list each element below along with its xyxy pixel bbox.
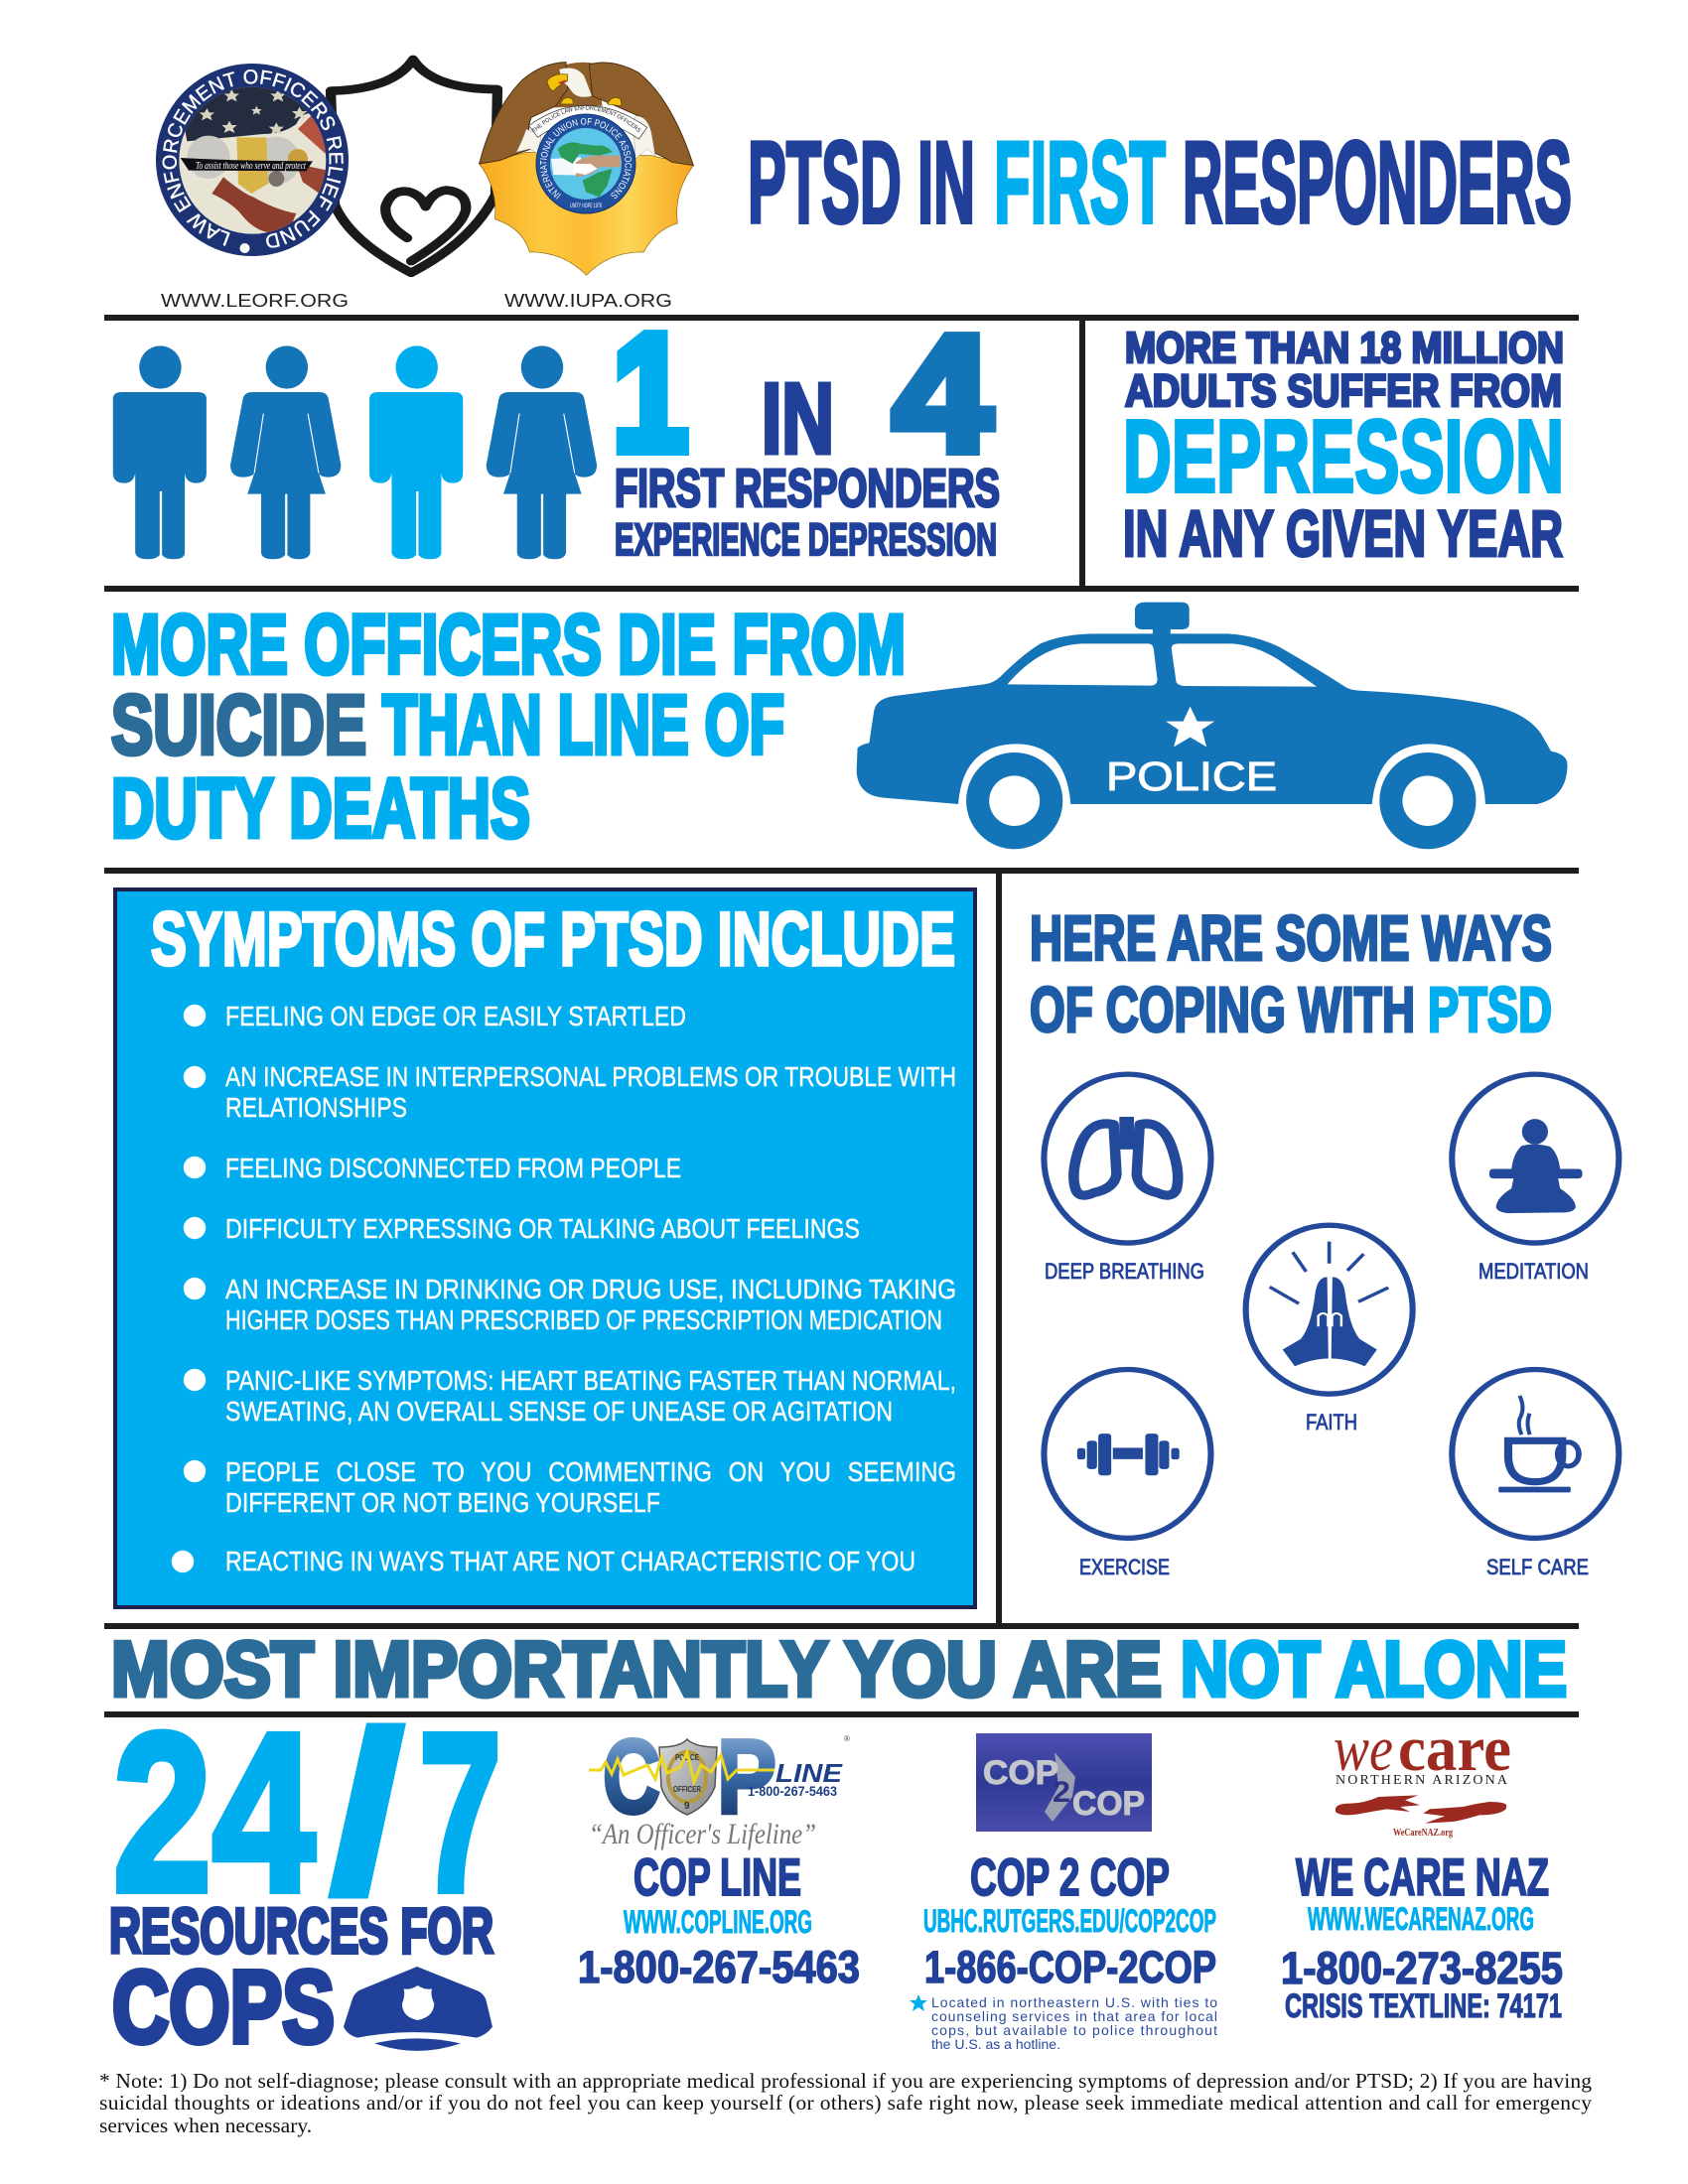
label: experience depression: EXPERIENCE DEPRESSION bbox=[615, 514, 997, 565]
icon: exercise dumbbell bbox=[1044, 1370, 1211, 1538]
icon: faith praying hands bbox=[1246, 1225, 1413, 1394]
phone: cop 2 cop: 1-866-COP-2COP bbox=[924, 1942, 1216, 1992]
logo: cop line: 1-800-267-5463 bbox=[748, 1783, 837, 1799]
icon: police car bbox=[857, 603, 1568, 849]
phone: cop line: 1-800-267-5463 bbox=[578, 1942, 860, 1992]
icon: police hat bbox=[344, 1967, 492, 2051]
logo: law enforcement officers relief fund: LAW ENFORCEMENT OFFICERS RELIEF FUND bbox=[163, 69, 344, 248]
logo: international union of police associations bbox=[479, 62, 694, 276]
name: we care naz: WE CARE NAZ bbox=[1296, 1848, 1549, 1907]
url: iupa: WWW.IUPA.ORG bbox=[504, 291, 672, 311]
logo: we care: we bbox=[1334, 1713, 1393, 1785]
resource: we care naz bbox=[1281, 1713, 1563, 2025]
heading: coping: OF COPING WITH bbox=[1030, 974, 1415, 1045]
logo: cop 2 cop: COP bbox=[1072, 1785, 1145, 1823]
symptom list: AN INCREASE IN INTERPERSONAL PROBLEMS OR TROUBLE WITH bbox=[225, 1061, 956, 1092]
logo: cop line: P bbox=[717, 1718, 776, 1836]
logo: we care: WeCareNAZ.org bbox=[1393, 1828, 1453, 1839]
note: cop 2 cop coverage: cops, but available to police throughout bbox=[931, 2022, 1217, 2038]
panel: 18 million adults: MORE THAN 18 MILLION bbox=[1125, 324, 1564, 372]
banner: flag motto: To assist those who serve and protect bbox=[196, 161, 306, 172]
url: copline: WWW.COPLINE.ORG bbox=[624, 1904, 812, 1940]
stat: 1 in 4: IN bbox=[762, 363, 834, 475]
label: meditation: MEDITATION bbox=[1478, 1259, 1589, 1284]
heading: coping bbox=[1030, 902, 1552, 1045]
logo: we care bbox=[1334, 1713, 1511, 1839]
symptom list: REACTING IN WAYS THAT ARE NOT CHARACTERISTIC OF YOU bbox=[225, 1546, 915, 1576]
title bbox=[748, 117, 1572, 247]
logo: heart shield bbox=[331, 60, 497, 273]
footnote: services when necessary. bbox=[99, 2114, 312, 2137]
panel: 18 million adults: ADULTS SUFFER FROM bbox=[1125, 365, 1562, 416]
stat: 24/7: 4 bbox=[212, 1688, 315, 1939]
symptom list bbox=[172, 1001, 956, 1576]
symptom list: PANIC-LIKE SYMPTOMS: HEART BEATING FASTER THAN NORMAL, bbox=[225, 1365, 956, 1396]
note: cop 2 cop coverage: counseling services in that area for local bbox=[931, 2008, 1217, 2024]
panel: officer suicide headline: THAN LINE OF bbox=[382, 678, 784, 771]
banner: not alone: NOT ALONE bbox=[1181, 1625, 1567, 1712]
crisis textline: CRISIS TEXTLINE: 74171 bbox=[1285, 1987, 1562, 2025]
label: first responders: FIRST RESPONDERS bbox=[615, 459, 1000, 518]
logo: cop line: POLICE bbox=[675, 1753, 700, 1762]
logo: cop line: LINE bbox=[775, 1758, 843, 1788]
symptom list: DIFFERENT OR NOT BEING YOURSELF bbox=[225, 1487, 660, 1518]
note: cop 2 cop coverage: the U.S. as a hotline. bbox=[931, 2036, 1060, 2052]
panel: symptoms of ptsd bbox=[115, 889, 975, 1607]
symptom list: HIGHER DOSES THAN PRESCRIBED OF PRESCRIPTION MEDICATION bbox=[225, 1304, 942, 1335]
label: cops: COPS bbox=[112, 1950, 335, 2064]
logo: we care: NORTHERN ARIZONA bbox=[1336, 1773, 1508, 1788]
logo: cop 2 cop: 2 bbox=[1053, 1776, 1070, 1809]
panel: officer suicide headline: MORE OFFICERS DIE FROM bbox=[111, 598, 906, 691]
name: cop line: COP LINE bbox=[633, 1848, 801, 1907]
section dividers bbox=[104, 315, 1579, 1717]
heading: symptoms: SYMPTOMS OF PTSD INCLUDE bbox=[151, 897, 955, 982]
stat: 1 in 4: 1 bbox=[613, 301, 688, 485]
icon: note star bbox=[910, 1994, 927, 2011]
label: resources for: RESOURCES FOR bbox=[109, 1895, 493, 1967]
symptom list: PEOPLE CLOSE TO YOU COMMENTING ON YOU SEEMING bbox=[225, 1456, 956, 1487]
panel: officer suicide headline: SUICIDE bbox=[111, 678, 366, 771]
stat: 1 in 4 bbox=[613, 301, 992, 486]
logo: cop line: OFFICER bbox=[673, 1785, 701, 1794]
icon: self care cup bbox=[1452, 1370, 1618, 1538]
icon: lungs bbox=[1044, 1074, 1211, 1243]
symptom list: RELATIONSHIPS bbox=[225, 1092, 407, 1123]
symptom list: SWEATING, AN OVERALL SENSE OF UNEASE OR AGITATION bbox=[225, 1396, 893, 1427]
logo: cop 2 cop: COP bbox=[983, 1754, 1058, 1792]
panel: officer suicide headline bbox=[111, 598, 906, 855]
panel: 18 million adults bbox=[1123, 324, 1564, 570]
icon: four people bbox=[113, 345, 597, 559]
panel: coping with ptsd bbox=[1030, 902, 1618, 1579]
logo: cop 2 cop bbox=[976, 1733, 1152, 1832]
note: cop 2 cop coverage: Located in northeastern U.S. with ties to bbox=[931, 1994, 1217, 2010]
stat: 24/7 bbox=[113, 1688, 501, 1939]
label: exercise: EXERCISE bbox=[1079, 1555, 1170, 1579]
label: self care: SELF CARE bbox=[1486, 1555, 1589, 1579]
resource: cop 2 cop bbox=[910, 1733, 1217, 2052]
icon: police car: POLICE bbox=[1106, 753, 1277, 799]
label: deep breathing: DEEP BREATHING bbox=[1045, 1259, 1204, 1284]
logo: we care: care bbox=[1398, 1713, 1511, 1785]
stat: 24/7: 2 bbox=[113, 1688, 211, 1939]
logo: cop line: 9 bbox=[684, 1801, 690, 1812]
symptom list: AN INCREASE IN DRINKING OR DRUG USE, INCLUDING TAKING bbox=[225, 1274, 956, 1304]
footnote: suicidal thoughts or ideations and/or if you do not feel you can keep yourself (or others) safe right now, please seek immediate medical attention and call for emergency bbox=[99, 2091, 1592, 2115]
logo: cop line: C bbox=[603, 1718, 660, 1836]
resource: cop line bbox=[578, 1718, 860, 1992]
panel: 24/7 resources bbox=[109, 1688, 501, 2064]
url: wecarenaz: WWW.WECARENAZ.ORG bbox=[1308, 1901, 1534, 1937]
stat: 24/7: / bbox=[331, 1688, 403, 1939]
logo: cop line: “An Officer's Lifeline” bbox=[589, 1818, 816, 1850]
label: faith: FAITH bbox=[1306, 1410, 1357, 1434]
name: cop 2 cop: COP 2 COP bbox=[970, 1848, 1170, 1907]
banner: not alone: MOST IMPORTANTLY YOU ARE bbox=[111, 1625, 1162, 1712]
logo: cop line: ® bbox=[844, 1734, 850, 1743]
icon: meditation bbox=[1452, 1074, 1618, 1243]
symptom list: FEELING DISCONNECTED FROM PEOPLE bbox=[225, 1153, 681, 1183]
header logos bbox=[156, 56, 694, 311]
symptom list: FEELING ON EDGE OR EASILY STARTLED bbox=[225, 1001, 686, 1031]
panel: 1 in 4 first responders bbox=[113, 301, 1000, 565]
logo: cop line bbox=[589, 1718, 850, 1850]
stat: 1 in 4: 4 bbox=[893, 302, 992, 486]
url: rutgers: UBHC.RUTGERS.EDU/COP2COP bbox=[923, 1903, 1216, 1939]
url: leorf: WWW.LEORF.ORG bbox=[161, 291, 349, 311]
footnote bbox=[99, 2069, 1592, 2137]
logo: international union of police associations: UNITY HOPE 1978 bbox=[570, 204, 602, 209]
title: FIRST bbox=[994, 117, 1166, 247]
phone: we care: 1-800-273-8255 bbox=[1281, 1943, 1563, 1993]
logo: international union of police associations: THE POLICE LAW ENFORCEMENT OFFICERS bbox=[531, 105, 641, 133]
note: cop 2 cop coverage bbox=[931, 1994, 1217, 2052]
stat: 24/7: 7 bbox=[419, 1688, 501, 1939]
title: PTSD IN bbox=[748, 117, 975, 247]
panel: officer suicide headline: DUTY DEATHS bbox=[111, 761, 530, 855]
heading: coping: PTSD bbox=[1428, 974, 1552, 1045]
symptom list: DIFFICULTY EXPRESSING OR TALKING ABOUT FEELINGS bbox=[225, 1213, 860, 1244]
footnote: * Note: 1) Do not self-diagnose; please consult with an appropriate medical professional if you are experiencing symptoms of depression and/or PTSD; 2) If you are having bbox=[99, 2069, 1592, 2093]
logo: international union of police associations: INTERNATIONAL UNION OF POLICE ASSOCIATIONS bbox=[540, 118, 632, 199]
